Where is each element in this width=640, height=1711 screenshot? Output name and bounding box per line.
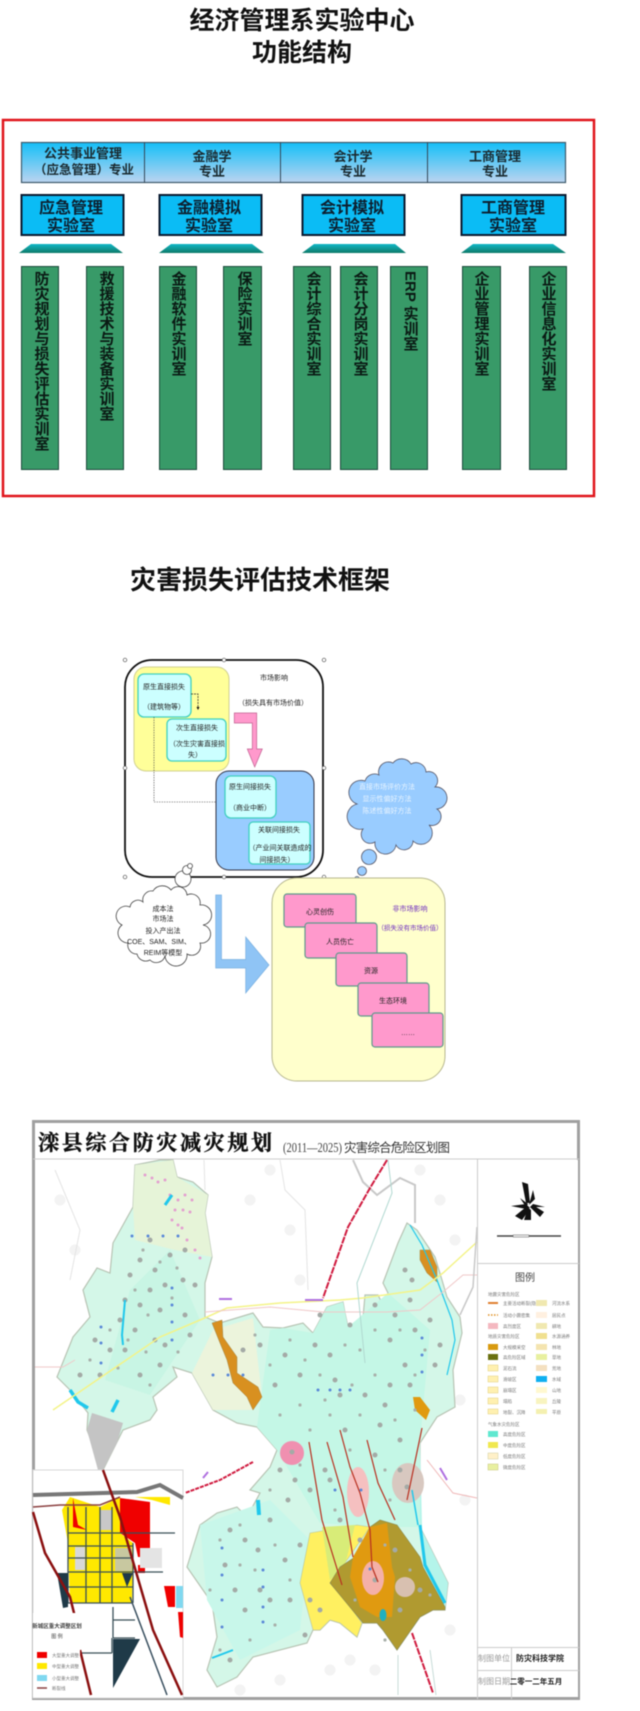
county area — [57, 1160, 462, 1687]
panel: market impact: 次生直接损失 — [176, 723, 218, 732]
legend items: 耕地 — [552, 1323, 561, 1330]
lab boxes: 实验室 — [47, 216, 95, 235]
panel: non-market impact — [272, 878, 445, 1081]
legend items: 荒地 — [552, 1365, 561, 1372]
arrow: blue — [216, 895, 269, 993]
inset legend: 小型重大调整 — [52, 1675, 79, 1682]
lab boxes: 工商管理 — [481, 198, 545, 217]
header row: majors: 专业 — [199, 164, 225, 179]
legend items: 水源涵养 — [552, 1333, 570, 1340]
map body — [35, 1160, 477, 1695]
header row: majors: （应急管理）专业 — [34, 162, 134, 177]
callout: blue cloud methods: 陈述性偏好方法 — [362, 806, 412, 815]
panel: market impact: 失） — [188, 750, 202, 759]
training room columns — [22, 266, 566, 470]
lab boxes: 应急管理 — [39, 198, 103, 217]
callout: blue cloud methods — [347, 759, 447, 882]
training room columns: 企业管理实训室 — [472, 270, 490, 376]
map title band — [33, 1122, 579, 1698]
panel: market impact: 间接损失） — [260, 855, 294, 864]
credits: 制图日期 — [478, 1676, 510, 1686]
panel: non-market impact: 资源 — [364, 966, 378, 975]
legend items: 主要活动断裂(隐伏段) — [503, 1300, 547, 1307]
header row: majors: 金融学 — [192, 149, 232, 164]
inset legend: 断裂线 — [52, 1685, 66, 1692]
title: lab centre function structure: 功能结构 — [252, 39, 352, 67]
map title band: 滦县综合防灾减灾规划 — [38, 1127, 272, 1157]
arrow: pink — [234, 713, 262, 767]
fault lines — [309, 1428, 422, 1585]
header row: majors: 专业 — [340, 164, 366, 179]
legend items: 微度危险区 — [503, 1464, 526, 1471]
inset map — [32, 1470, 183, 1698]
legend items: 中度危险区 — [503, 1442, 526, 1449]
lab boxes: 会计模拟 — [320, 198, 384, 217]
legend items: 气象水灾危险区 — [488, 1421, 520, 1428]
legend items: 居民点 — [552, 1313, 566, 1319]
legend items: 大规模采空 — [503, 1344, 526, 1351]
blue town labels — [101, 1236, 422, 1627]
legend items: 泥石流 — [503, 1365, 517, 1372]
lab boxes: 金融模拟 — [177, 198, 241, 217]
credits: 制图单位 — [478, 1653, 510, 1663]
training room columns: 救援技术与装备实训室 — [98, 271, 114, 421]
inset legend: 大型重大调整 — [52, 1652, 79, 1659]
callout: white cloud methods: COE、SAM、SIM、 — [127, 939, 191, 946]
diagram: loss assessment framework — [116, 658, 447, 1081]
legend items: 高危险区域 — [503, 1354, 526, 1361]
credits: 二零一二年五月 — [510, 1676, 562, 1686]
lab boxes: 实验室 — [489, 216, 537, 235]
callout: white cloud methods: REIM等模型 — [144, 948, 182, 957]
header row: majors: 公共事业管理 — [44, 146, 122, 161]
faint neighbouring towns — [60, 1170, 465, 1690]
legend items: 活动小震密集 — [503, 1312, 530, 1319]
legend items: 山地 — [552, 1387, 561, 1394]
legend items: 丘陵 — [552, 1398, 561, 1405]
legend items: 塌陷 — [503, 1398, 512, 1405]
map: Luan county disaster hazard zoning — [32, 1122, 579, 1699]
panel: function structure — [3, 120, 594, 496]
callout: blue cloud methods: 直接市场评价方法 — [359, 782, 415, 791]
inset legend: 中型重大调整 — [52, 1663, 79, 1670]
panel: market impact: （产业间关联造成的 — [248, 843, 312, 852]
panel: market impact: 原生间接损失 — [229, 782, 271, 791]
panel: non-market impact: 非市场影响 — [392, 904, 428, 913]
panel: non-market impact: …… — [401, 1030, 415, 1037]
inset legend: 图 例 — [51, 1633, 63, 1640]
panel: market impact: 市场影响 — [260, 673, 288, 682]
panel: market impact: 原生直接损失 — [143, 682, 185, 691]
side column: legend and credits — [477, 1159, 579, 1699]
inset legend — [32, 1613, 82, 1697]
header row: majors: 专业 — [482, 164, 508, 179]
heading: disaster loss assessment framework: 灾害损失评估技术框架 — [130, 565, 390, 595]
training room columns: 保险实训室 — [236, 271, 252, 346]
map title band: (2011—2025) — [283, 1141, 342, 1156]
legend items: 草地 — [552, 1354, 561, 1361]
legend heading: 图例 — [515, 1271, 535, 1284]
panel: market impact: （建筑物等） — [143, 702, 185, 711]
callout: white cloud methods — [116, 864, 212, 966]
training room columns: 防灾规划与损失评估实训室 — [32, 270, 50, 451]
legend items: 河流水系 — [552, 1300, 570, 1307]
panel: market impact — [123, 658, 326, 879]
lab boxes — [22, 195, 566, 235]
header row: majors: 工商管理 — [469, 149, 521, 164]
rivers and lakes — [70, 1195, 455, 1658]
panel: market impact: （次生灾害直接损 — [169, 739, 225, 748]
legend items: 高烈度区 — [503, 1323, 521, 1330]
panel: non-market impact: 生态环境 — [379, 996, 407, 1005]
callout: white cloud methods: 投入产出法 — [146, 926, 180, 935]
legend items: 高度危险区 — [503, 1431, 526, 1438]
panel: market impact: （损失具有市场价值） — [238, 698, 308, 707]
callout: white cloud methods: 成本法 — [152, 904, 174, 913]
pink dot cluster — [145, 1175, 200, 1258]
legend items: 地震灾害危险区 — [488, 1291, 520, 1298]
header row: majors — [22, 142, 566, 183]
legend items: 地质灾害危险区 — [488, 1333, 520, 1340]
panel: non-market impact: 心灵创伤 — [306, 907, 334, 916]
legend items — [488, 1291, 570, 1471]
roads — [35, 1160, 477, 1695]
legend items: 崩塌区 — [503, 1387, 517, 1394]
legend items: 平原 — [552, 1410, 561, 1416]
panel: non-market impact: （损失没有市场价值） — [378, 923, 442, 932]
lab boxes: 实验室 — [328, 216, 376, 235]
panel: market impact: 关联间接损失 — [258, 825, 300, 834]
callout: blue cloud methods: 显示性偏好方法 — [362, 794, 412, 803]
inset legend: 新城区重大调整区划 — [32, 1622, 82, 1630]
railway dashed red — [185, 1160, 433, 1693]
icon: compass — [511, 1182, 545, 1220]
credits: 防灾科技学院 — [516, 1653, 564, 1663]
training room columns: 会计分岗实训室 — [352, 270, 368, 376]
legend items: 低度危险区 — [503, 1453, 526, 1460]
lab boxes: 实验室 — [185, 216, 233, 235]
legend items: 水域 — [552, 1376, 561, 1382]
panel: non-market impact: 人员伤亡 — [326, 937, 354, 946]
scale bar — [497, 1235, 561, 1237]
legend items: 滑坡区 — [503, 1376, 517, 1383]
legend items: 林地 — [552, 1344, 561, 1351]
training room columns: 会计综合实训室 — [304, 270, 322, 376]
title: lab centre function structure: 经济管理系实验中心 — [189, 7, 415, 35]
training room columns: 企业信息化实训室 — [540, 270, 556, 391]
gray settlements — [80, 1240, 440, 1660]
title: lab centre function structure — [189, 7, 415, 67]
panel: market impact: （商业中断） — [229, 803, 271, 812]
map title band: 灾害综合危险区划图 — [344, 1140, 450, 1155]
header row: majors: 会计学 — [333, 149, 373, 164]
training room columns: 金融软件实训室 — [170, 270, 186, 376]
callout: white cloud methods: 市场法 — [152, 914, 174, 923]
credits — [478, 1653, 564, 1686]
training room columns: ERP 实训室 — [402, 271, 418, 351]
trapezoid connectors — [19, 244, 566, 253]
legend items: 地裂、沉降 — [503, 1409, 526, 1416]
hazard zones — [300, 1525, 370, 1637]
